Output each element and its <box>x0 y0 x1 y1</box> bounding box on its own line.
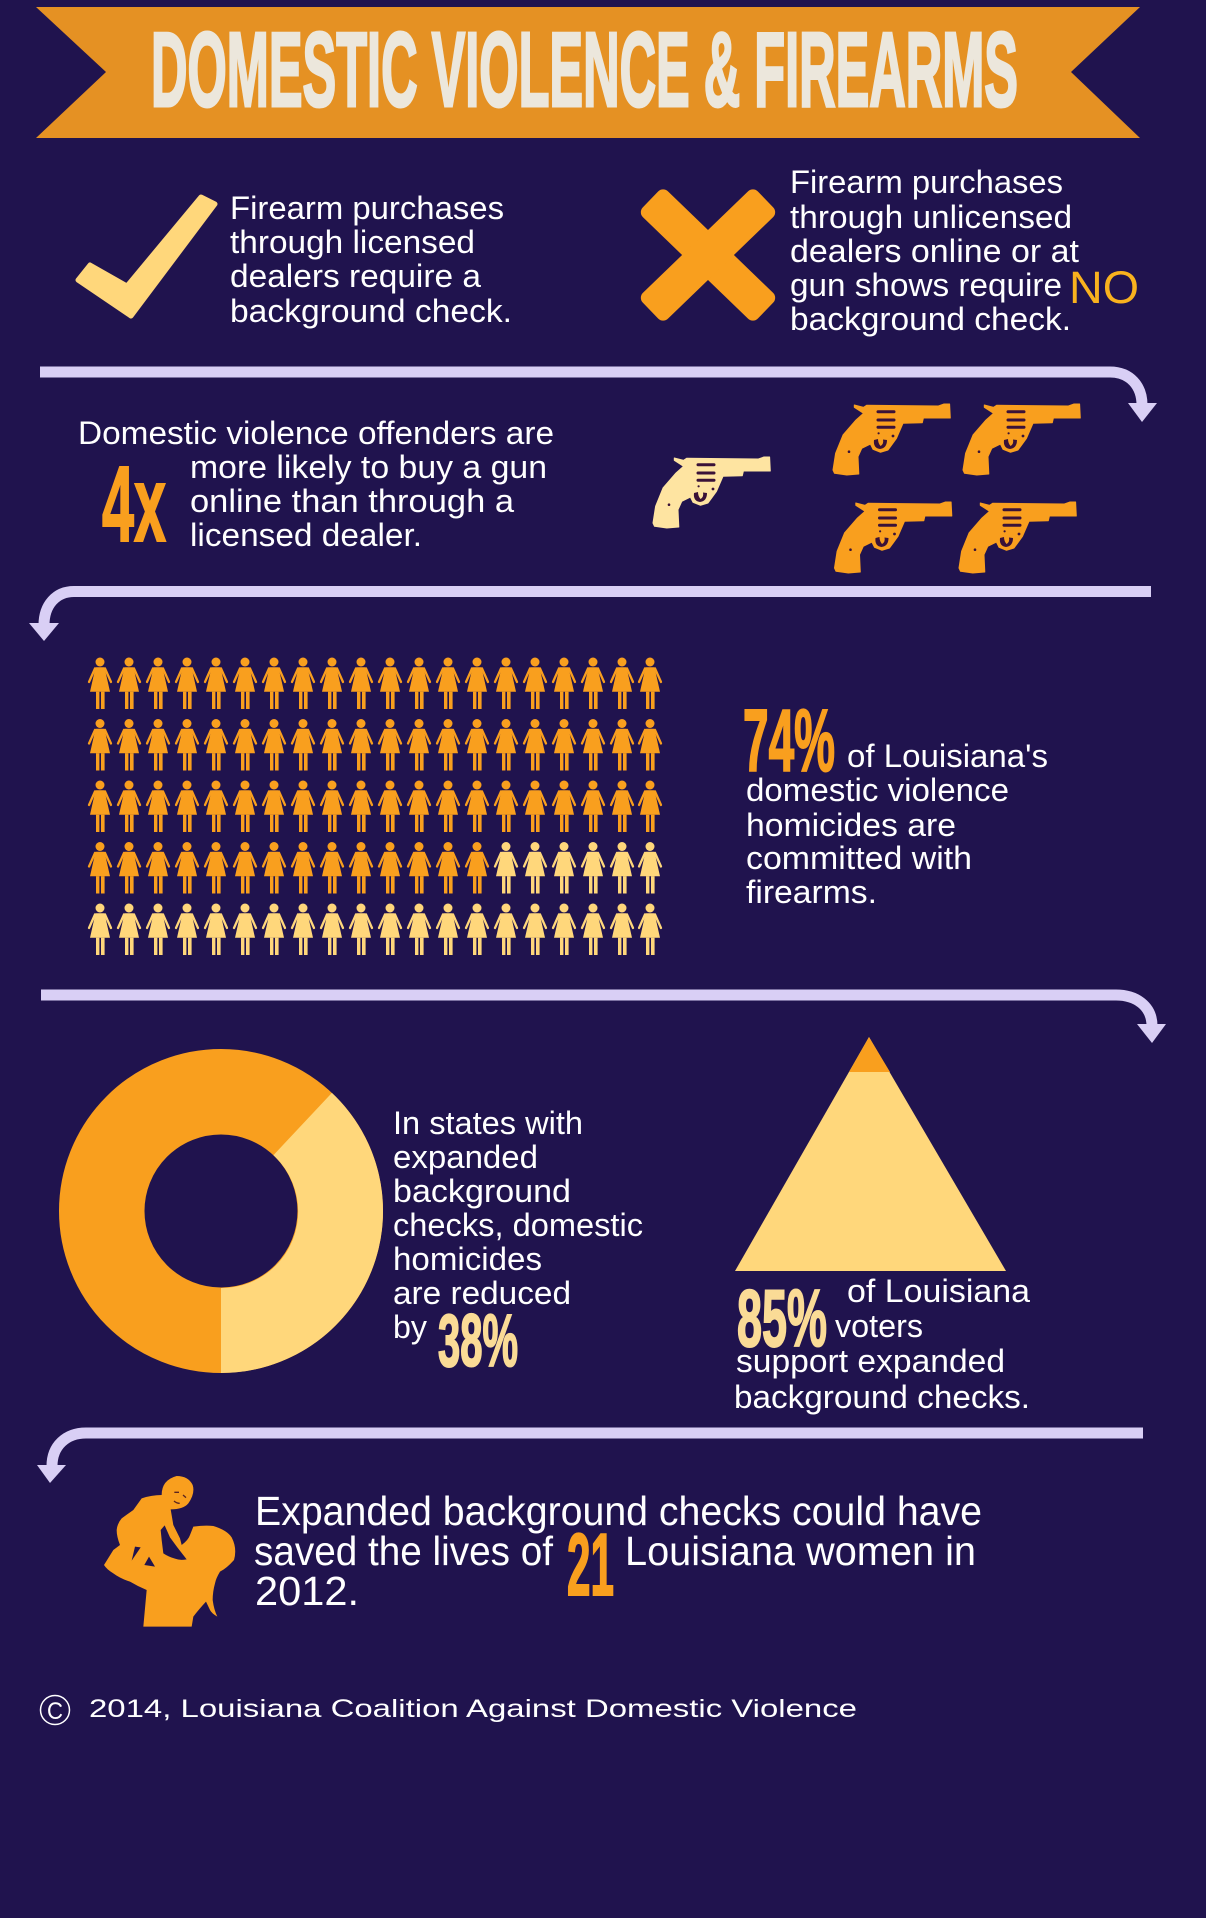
panel: closing statement: saved the lives of <box>254 1528 554 1574</box>
donut chart: 38% <box>102 1092 383 1373</box>
panel: closing statement: Expanded background checks could have <box>255 1488 982 1534</box>
panel: 74% statistic: committed with <box>746 840 972 876</box>
arrow: right turn 2 <box>41 995 1166 1043</box>
panel: 38% statistic: homicides <box>393 1241 542 1277</box>
text: licensed dealers: background check. <box>230 293 512 329</box>
arrow: left turn 2 <box>37 1433 1143 1483</box>
panel: 4x statistic: licensed dealer. <box>190 517 422 553</box>
arrow: right turn 1 <box>40 372 1157 422</box>
panel: 38% statistic: expanded <box>393 1139 538 1175</box>
title banner <box>36 7 1140 138</box>
text: unlicensed dealers <box>790 164 1079 337</box>
panel: 4x statistic: Domestic violence offenders are <box>78 415 554 451</box>
text: unlicensed dealers: background check. <box>790 301 1071 337</box>
stat: 4x: 4x <box>102 443 166 564</box>
footer: copyright: C <box>47 1698 63 1725</box>
footer: copyright: 2014, Louisiana Coalition Against Domestic Violence <box>89 1695 857 1723</box>
panel: 38% statistic <box>393 1105 643 1382</box>
pictogram: 74 of 100 women <box>89 658 661 955</box>
text: unlicensed dealers: dealers online or at <box>790 233 1079 269</box>
panel: closing statement: 2012. <box>255 1568 359 1614</box>
panel: 38% statistic: checks, domestic <box>393 1207 643 1243</box>
arrow: left turn 1 <box>29 592 1151 641</box>
text: unlicensed dealers: through unlicensed <box>790 199 1072 235</box>
panel: closing statement: Louisiana women in <box>625 1528 976 1574</box>
text: unlicensed dealers: Firearm purchases <box>790 164 1063 200</box>
footer: copyright <box>40 1695 857 1725</box>
icon: revolvers <box>653 404 1080 573</box>
stat: 85%: 85% <box>737 1274 827 1364</box>
panel: closing statement <box>254 1488 982 1614</box>
panel: licensed dealers <box>78 190 512 329</box>
text: licensed dealers: through licensed <box>230 224 475 260</box>
stat: 74%: 74% <box>743 691 835 790</box>
panel: 85% statistic <box>734 1273 1030 1415</box>
stat: 38%: 38% <box>438 1299 518 1382</box>
text: licensed dealers: Firearm purchases <box>230 190 504 226</box>
panel: 74% statistic: domestic violence <box>746 772 1009 808</box>
panel: 38% statistic: In states with <box>393 1105 583 1141</box>
panel: 38% statistic: are reduced <box>393 1275 571 1311</box>
panel: 85% statistic: of Louisiana <box>847 1273 1030 1309</box>
panel: 74% statistic: homicides are <box>746 807 956 843</box>
icon: mother lifting baby <box>104 1476 235 1627</box>
triangle chart: 85% <box>735 1037 1006 1271</box>
panel: 85% statistic: voters <box>835 1308 923 1344</box>
panel: 74% statistic: firearms. <box>746 874 877 910</box>
text: licensed dealers <box>230 190 512 329</box>
icon: X mark <box>638 186 778 324</box>
panel: 74% statistic: of Louisiana's <box>847 738 1048 774</box>
panel: closing statement: 21 <box>567 1515 614 1614</box>
panel: 38% statistic: by <box>393 1309 427 1345</box>
panel: 38% statistic: background <box>393 1173 571 1209</box>
emphasis: NO: NO <box>1069 262 1139 313</box>
panel: 85% statistic: support expanded <box>736 1343 1005 1379</box>
text: licensed dealers: dealers require a <box>230 258 481 294</box>
panel: 4x statistic <box>78 415 554 564</box>
icon: check mark <box>78 197 215 316</box>
panel: 4x statistic: online than through a <box>190 483 514 519</box>
text: unlicensed dealers: gun shows require <box>790 267 1062 303</box>
panel: 85% statistic: background checks. <box>734 1379 1030 1415</box>
panel: unlicensed dealers <box>638 164 1139 337</box>
panel: 4x statistic: more likely to buy a gun <box>190 449 547 485</box>
panel: 74% statistic <box>743 691 1048 910</box>
